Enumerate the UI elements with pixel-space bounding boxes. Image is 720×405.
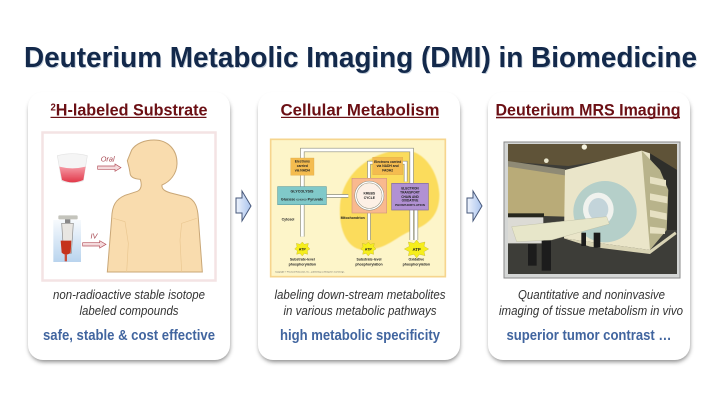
caption: in various metabolic pathways	[284, 303, 437, 318]
glycolysis box	[278, 187, 326, 205]
phosphorylation labels: Substrate-level	[357, 258, 382, 262]
ATP outputs: ATP	[299, 248, 306, 252]
electron transport chain box: PHOSPHORYLATION	[395, 203, 425, 207]
title: Deuterium Metabolic Imaging (DMI) in Biomedicine	[24, 42, 697, 74]
heading: 2H-labeled Substrate: 2	[50, 102, 56, 114]
benefit: high metabolic specificity: high metabolic specificity	[280, 327, 441, 344]
caption	[499, 287, 683, 318]
compartment labels: Mitochondrion	[341, 216, 365, 220]
phosphorylation labels	[289, 258, 430, 266]
electron transport chain box: ELECTRON	[401, 186, 419, 190]
copyright line: Copyright © Pearson Education, Inc., publishing as Benjamin Cummings.	[275, 271, 345, 274]
glycolysis box: GLYCOLYSIS	[291, 190, 314, 194]
electron transport chain box: TRANSPORT	[400, 191, 420, 195]
electron carrier boxes: Electrons	[295, 160, 310, 164]
caption: labeled compounds	[80, 303, 179, 318]
phosphorylation labels: phosphorylation	[355, 262, 383, 266]
arrow: panel 2 to panel 3	[467, 191, 482, 221]
electron transport chain box	[392, 183, 428, 210]
ATP outputs: ATP	[412, 247, 421, 252]
arrow: IV: IV	[91, 232, 99, 241]
title: Deuterium Metabolic Imaging (DMI) in Biomedicine	[25, 43, 698, 75]
krebs cycle box	[352, 178, 387, 213]
panel: cellular metabolism	[258, 92, 460, 362]
arrow: panel 1 to panel 2	[236, 191, 251, 221]
caption: imaging of tissue metabolism in vivo	[499, 303, 683, 318]
glycolysis box: Glucose ▭▭▭ Pyruvate	[281, 197, 323, 201]
heading: 2H-labeled Substrate: H-labeled Substrate	[56, 100, 208, 120]
krebs cycle box: KREBS	[364, 191, 376, 195]
arrow: oral	[98, 154, 121, 171]
benefit: safe, stable and cost effective: safe, stable & cost effective	[43, 327, 215, 344]
photo: MRI scanner room	[504, 142, 680, 278]
icon: syringe	[53, 215, 81, 262]
arrow: oral: Oral	[101, 154, 115, 163]
benefit: superior tumor contrast: superior tumor contrast …	[506, 327, 672, 344]
panel: 2H-labeled substrate	[28, 92, 230, 362]
phosphorylation labels: phosphorylation	[403, 262, 430, 266]
caption	[53, 287, 205, 318]
phosphorylation labels: Substrate-level	[290, 258, 315, 262]
heading: Deuterium MRS Imaging: Deuterium MRS Imaging	[496, 100, 680, 120]
electron transport chain box: OXIDATIVE	[402, 199, 418, 203]
ATP outputs	[295, 240, 429, 258]
krebs cycle box: CYCLE	[364, 196, 376, 200]
compartment labels: Cytosol	[282, 218, 294, 222]
panel: deuterium MRS imaging	[488, 92, 690, 362]
mitochondrion	[340, 150, 439, 250]
electron carrier boxes: Electrons carried	[374, 160, 401, 164]
caption	[274, 287, 446, 318]
pathway pipes	[302, 150, 416, 240]
arrow: IV	[83, 232, 106, 248]
phosphorylation labels: Oxidative	[408, 258, 424, 262]
electron carrier boxes: carried	[297, 164, 308, 168]
electron transport chain box: CHAIN AND	[401, 195, 420, 199]
caption: non-radioactive stable isotope	[53, 287, 205, 302]
electron carrier boxes: via NADH	[295, 168, 311, 172]
icon: human body	[107, 140, 202, 272]
icon: medicine cup	[57, 154, 87, 183]
caption: labeling down-stream metabolites	[274, 287, 446, 302]
heading: Cellular Metabolism: Cellular Metabolism	[280, 100, 440, 120]
illustration: oral and IV delivery to the body	[42, 132, 216, 280]
caption: Quantitative and noninvasive	[518, 287, 665, 302]
phosphorylation labels: phosphorylation	[289, 262, 316, 266]
diagram: cellular respiration pathways	[271, 139, 445, 277]
ATP outputs: ATP	[365, 248, 372, 252]
electron carrier boxes: via NADH and	[377, 164, 399, 168]
electron carrier boxes	[291, 157, 403, 175]
electron carrier boxes: FADH2	[382, 168, 393, 172]
compartment labels	[282, 216, 365, 222]
